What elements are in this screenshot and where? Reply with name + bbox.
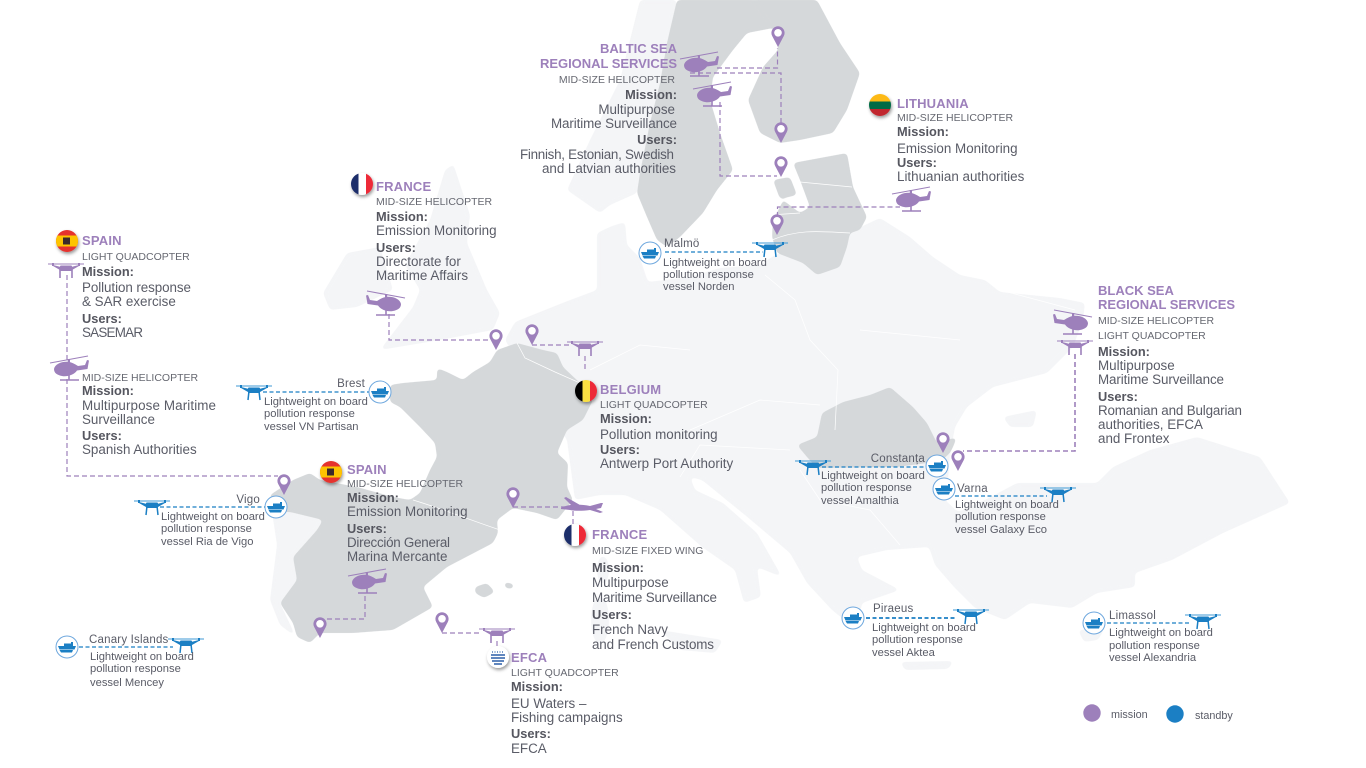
mission text 2: Maritime Surveillance xyxy=(1098,372,1224,387)
type: MID-SIZE HELICOPTER xyxy=(897,112,1014,124)
standby: Brest: pollution response xyxy=(264,408,355,420)
panel: Spain north-west xyxy=(48,230,291,495)
users text: Romanian and Bulgarian xyxy=(1098,403,1242,418)
users text: Spanish Authorities xyxy=(82,442,197,457)
standby: Constanța: vessel Amalthia xyxy=(821,495,900,507)
icon: helicopter xyxy=(348,569,387,593)
icon: quadcopter xyxy=(567,341,603,356)
flag: Lithuania xyxy=(869,94,891,116)
standby: Malmö: vessel Norden xyxy=(663,281,735,293)
heading 2: REGIONAL SERVICES xyxy=(1098,297,1235,312)
standby: Limassol: Limassol xyxy=(1109,610,1156,622)
icon: helicopter xyxy=(50,356,89,380)
users text 2: and French Customs xyxy=(592,637,714,652)
standby: Limassol xyxy=(1083,610,1221,664)
heading: SPAIN xyxy=(347,462,387,477)
icon: helicopter xyxy=(1053,310,1092,334)
mission text: Multipurpose xyxy=(1098,358,1175,373)
users: Users: xyxy=(376,240,416,255)
standby: Constanța: Lightweight on board xyxy=(821,470,925,482)
type: MID-SIZE FIXED WING xyxy=(592,545,703,557)
icon: pin north xyxy=(771,26,785,47)
users: Users: xyxy=(1098,389,1138,404)
panel: EFCA xyxy=(435,612,623,756)
heading: BELGIUM xyxy=(600,382,661,397)
mission: Mission: xyxy=(897,124,949,139)
icon: pin xyxy=(313,617,327,638)
users: Users: xyxy=(592,607,632,622)
icon: helicopter 2 xyxy=(693,82,732,106)
mission: Mission: xyxy=(82,264,134,279)
aircraft type: MID-SIZE HELICOPTER xyxy=(559,74,675,86)
heading: FRANCE xyxy=(592,527,647,542)
mission text: Emission Monitoring xyxy=(897,141,1018,156)
users text: SASEMAR xyxy=(82,325,143,340)
standby: Varna: vessel Galaxy Eco xyxy=(955,524,1047,536)
standby: Varna: Varna xyxy=(957,483,988,495)
mission: Mission: xyxy=(600,411,652,426)
mission text: Pollution monitoring xyxy=(600,427,718,442)
flag: Spain xyxy=(320,461,342,483)
mission: Mission: xyxy=(347,490,399,505)
connector xyxy=(513,507,573,524)
standby: Varna: pollution response xyxy=(955,511,1046,523)
icon: pin xyxy=(435,612,449,633)
mission text: EU Waters – xyxy=(511,696,587,711)
mission: Mission: xyxy=(511,679,563,694)
users 2: Users: xyxy=(82,428,122,443)
icon: pin xyxy=(489,329,503,350)
mission text 2: & SAR exercise xyxy=(82,294,176,309)
panel: France Mediterranean xyxy=(506,487,717,652)
standby: Malmö xyxy=(639,238,788,293)
mission text line 2: Maritime Surveillance xyxy=(551,116,677,131)
users text: Finnish, Estonian, Swedish xyxy=(520,147,674,162)
icon: quadcopter xyxy=(1057,340,1093,355)
standby: Canary Islands xyxy=(56,634,204,689)
icon: quadcopter xyxy=(48,263,84,278)
standby: Malmö: Malmö xyxy=(664,238,700,250)
standby: Canary Islands: Canary Islands xyxy=(89,634,169,646)
mission text: Multipurpose Maritime xyxy=(82,398,216,413)
users text 2: authorities, EFCA xyxy=(1098,417,1203,432)
standby: Varna: Lightweight on board xyxy=(955,499,1059,511)
users text: Dirección General xyxy=(347,535,450,550)
standby: Varna xyxy=(933,478,1076,536)
users text: EFCA xyxy=(511,741,547,756)
mission: Mission: xyxy=(592,560,644,575)
connector xyxy=(532,345,585,372)
standby: Piraeus xyxy=(842,603,989,659)
mission: Mission: xyxy=(625,87,677,102)
mission text 2: Maritime Surveillance xyxy=(592,590,717,605)
connector xyxy=(442,633,497,647)
standby: Vigo: pollution response xyxy=(161,523,252,535)
standby: Limassol: vessel Alexandria xyxy=(1109,652,1197,664)
type: LIGHT QUADCOPTER xyxy=(511,667,619,679)
users text: Directorate for xyxy=(376,254,461,269)
icon: pin Gotland area xyxy=(774,156,788,177)
type 1: MID-SIZE HELICOPTER xyxy=(1098,315,1215,327)
icon: pin xyxy=(506,487,520,508)
map: light land base of Europe xyxy=(270,0,1290,670)
users: Users: xyxy=(637,132,677,147)
users text line 2: and Latvian authorities xyxy=(542,161,676,176)
legend: standby xyxy=(1195,710,1233,722)
heading: BLACK SEA xyxy=(1098,283,1174,298)
standby: Piraeus: Piraeus xyxy=(873,603,913,615)
standby: Piraeus: Lightweight on board xyxy=(872,622,976,634)
standby: Constanța: pollution response xyxy=(821,482,912,494)
heading: LITHUANIA xyxy=(897,96,969,111)
panel: Belgium xyxy=(525,324,734,471)
icon: pin Stockholm xyxy=(774,122,788,143)
standby: Canary Islands: pollution response xyxy=(90,663,181,675)
standby: Brest: vessel VN Partisan xyxy=(264,421,359,433)
icon: pin xyxy=(277,474,291,495)
icon: pin 1 xyxy=(936,432,950,453)
icon: helicopter xyxy=(892,187,931,211)
mission: Mission: xyxy=(1098,344,1150,359)
users: Users: xyxy=(347,521,387,536)
connector xyxy=(963,354,1075,451)
panel: France Channel xyxy=(351,173,503,350)
standby: Malmö: pollution response xyxy=(663,269,754,281)
type: MID-SIZE HELICOPTER xyxy=(376,196,493,208)
icon: quadcopter xyxy=(479,628,515,643)
users text: French Navy xyxy=(592,622,668,637)
users text 2: Marina Mercante xyxy=(347,549,447,564)
flag: Belgium xyxy=(575,380,597,402)
users text 3: and Frontex xyxy=(1098,431,1170,446)
standby: Constanța: Constanța xyxy=(871,453,925,465)
users text 2: Maritime Affairs xyxy=(376,268,468,283)
standby: Vigo xyxy=(134,494,287,548)
icon: fixed wing aircraft xyxy=(561,497,603,513)
panel: Baltic Sea regional services xyxy=(520,26,788,177)
users: Users: xyxy=(511,726,551,741)
type: LIGHT QUADCOPTER xyxy=(82,251,190,263)
standby: Vigo: Lightweight on board xyxy=(161,511,265,523)
icon: helicopter 1 xyxy=(680,52,719,76)
standby: Constanța xyxy=(795,453,948,507)
heading: FRANCE xyxy=(376,179,431,194)
icon: pin 2 xyxy=(951,450,965,471)
standby: Brest: Lightweight on board xyxy=(264,396,368,408)
connector xyxy=(389,314,490,340)
mission text: Pollution response xyxy=(82,280,191,295)
type 2: LIGHT QUADCOPTER xyxy=(1098,330,1206,342)
flag: France xyxy=(564,524,586,546)
mission text: Multipurpose xyxy=(598,102,675,117)
connector xyxy=(67,275,278,476)
standby: Vigo: vessel Ria de Vigo xyxy=(161,536,253,548)
mission text: Multipurpose xyxy=(592,575,669,590)
panel: Black Sea regional services xyxy=(936,283,1242,471)
users: Users: xyxy=(82,311,122,326)
icon: pin xyxy=(525,324,539,345)
mission text: Emission Monitoring xyxy=(347,504,468,519)
heading: EFCA xyxy=(511,650,548,665)
logo: EFCA xyxy=(487,646,509,668)
standby: Vigo: Vigo xyxy=(236,494,260,506)
heading: SPAIN xyxy=(82,233,122,248)
standby: Limassol: Lightweight on board xyxy=(1109,627,1213,639)
type: MID-SIZE HELICOPTER xyxy=(347,478,464,490)
panel: Spain south xyxy=(313,461,468,638)
flag: France xyxy=(351,173,373,195)
heading: Baltic Sea: BALTIC SEA xyxy=(600,41,678,56)
mission text: Emission Monitoring xyxy=(376,223,497,238)
mission 2: Mission: xyxy=(82,383,134,398)
connector xyxy=(327,595,365,619)
standby: Limassol: pollution response xyxy=(1109,640,1200,652)
standby: Piraeus: vessel Aktea xyxy=(872,647,936,659)
map: highlighted coastal countries in dark grey xyxy=(270,0,957,643)
panel: Lithuania xyxy=(770,94,1025,235)
heading: Regional Services: REGIONAL SERVICES xyxy=(540,56,677,71)
users text: Lithuanian authorities xyxy=(897,169,1025,184)
users: Users: xyxy=(600,442,640,457)
users: Users: xyxy=(897,155,937,170)
standby: Malmö: Lightweight on board xyxy=(663,257,767,269)
connector lines xyxy=(690,48,781,176)
standby: Canary Islands: Lightweight on board xyxy=(90,651,194,663)
users text: Antwerp Port Authority xyxy=(600,456,734,471)
flag: Spain xyxy=(56,230,78,252)
icon: pin xyxy=(770,214,784,235)
type: LIGHT QUADCOPTER xyxy=(600,399,708,411)
connector xyxy=(778,207,900,217)
type 2: MID-SIZE HELICOPTER xyxy=(82,372,199,384)
icon: helicopter xyxy=(366,291,405,315)
standby: Brest: Brest xyxy=(337,378,366,390)
standby: Piraeus: pollution response xyxy=(872,634,963,646)
mission text 2: Surveillance xyxy=(82,412,155,427)
standby: Brest xyxy=(236,378,391,433)
legend: mission xyxy=(1111,709,1148,721)
legend xyxy=(1083,704,1233,723)
mission text 2: Fishing campaigns xyxy=(511,710,623,725)
standby: Canary Islands: vessel Mencey xyxy=(90,677,164,689)
mission: Mission: xyxy=(376,209,428,224)
